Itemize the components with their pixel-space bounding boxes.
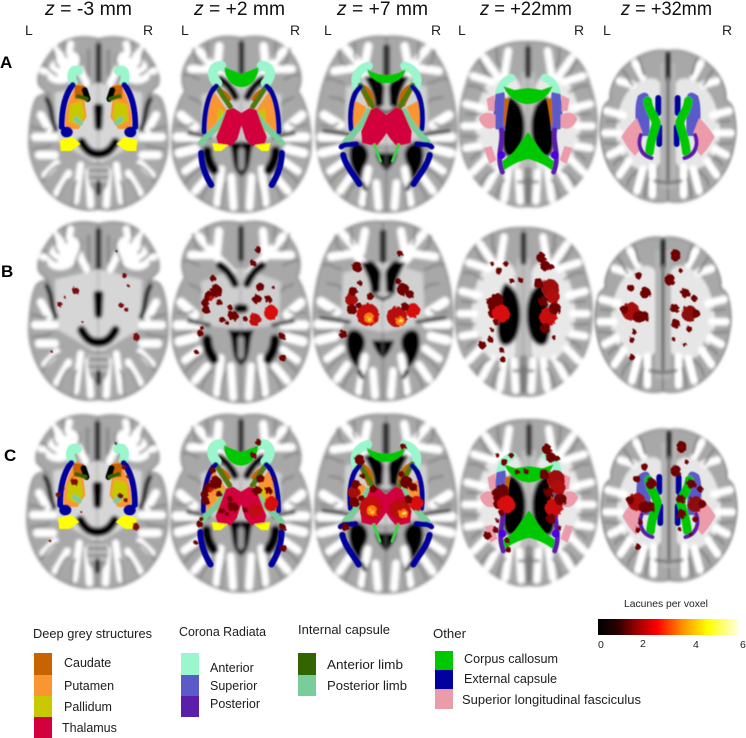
row A: z=+32 atlas [600, 50, 736, 202]
legend: other: External capsule [464, 672, 557, 686]
legend: deep grey structures: Pallidum [64, 700, 112, 714]
legend: corona radiata: Superior [210, 679, 257, 693]
colour bar: lacunes per voxel: 0 [598, 639, 604, 651]
row C: z=+32 combined [601, 429, 737, 581]
row C: z=+22 combined [460, 420, 598, 586]
colour bar: lacunes per voxel: 2 [640, 638, 646, 650]
legend: internal capsule [298, 623, 407, 696]
legend: deep grey structures: Caudate [64, 656, 111, 670]
side labels: left and right markers: R [574, 22, 584, 38]
row C: z=+7 combined [315, 414, 457, 593]
legend: other: Superior longitudinal fasciculus [462, 693, 641, 707]
side labels: left and right markers: R [431, 22, 441, 38]
side labels: left and right markers: R [290, 22, 300, 38]
legend: internal capsule: Anterior limb [327, 658, 403, 672]
legend: deep grey structures [33, 627, 152, 738]
legend: other [433, 627, 641, 709]
colour bar: lacunes per voxel: 6 [740, 639, 746, 651]
row B: z=-3 lesions [29, 222, 168, 400]
colour bar: lacunes per voxel [598, 598, 746, 651]
row A: z=+22 atlas [459, 42, 597, 207]
legend: other: Other [433, 627, 466, 641]
legend: other: Corpus callosum [464, 652, 558, 666]
row C: z=-3 combined [27, 415, 168, 588]
row A: z=+2 atlas [172, 37, 311, 212]
row A: z=+7 atlas [316, 36, 457, 212]
row label B: B [1, 262, 13, 281]
row A: z=-3 atlas [29, 37, 168, 210]
side labels: left and right markers [25, 22, 732, 38]
legend: deep grey structures: Putamen [64, 679, 114, 693]
legend: deep grey structures: Deep grey structures [33, 627, 152, 641]
row C: z=+2 combined [171, 415, 311, 592]
legend: internal capsule: Posterior limb [327, 679, 407, 693]
legend: corona radiata: Posterior [210, 697, 260, 711]
side labels: left and right markers: L [25, 22, 33, 38]
side labels: left and right markers: L [603, 22, 611, 38]
legend: corona radiata: Anterior [210, 661, 254, 675]
row label A: A [0, 53, 12, 72]
legend: deep grey structures: Thalamus [62, 721, 117, 735]
side labels: left and right markers: L [458, 22, 466, 38]
side labels: left and right markers: R [722, 22, 732, 38]
side labels: left and right markers: R [143, 22, 153, 38]
row B: z=+2 lesions [172, 222, 310, 402]
side labels: left and right markers: L [181, 22, 189, 38]
side labels: left and right markers: L [324, 22, 332, 38]
row B: z=+22 lesions [455, 228, 592, 396]
colour bar: lacunes per voxel: 4 [693, 639, 699, 651]
legend: corona radiata: Corona Radiata [179, 625, 266, 639]
legend: corona radiata [179, 625, 266, 717]
row B: z=+7 lesions [313, 221, 453, 401]
row B: z=+32 lesions [595, 237, 731, 392]
colour bar: lacunes per voxel: Lacunes per voxel [624, 598, 708, 610]
legend: internal capsule: Internal capsule [298, 623, 390, 637]
row label C: C [4, 446, 16, 465]
